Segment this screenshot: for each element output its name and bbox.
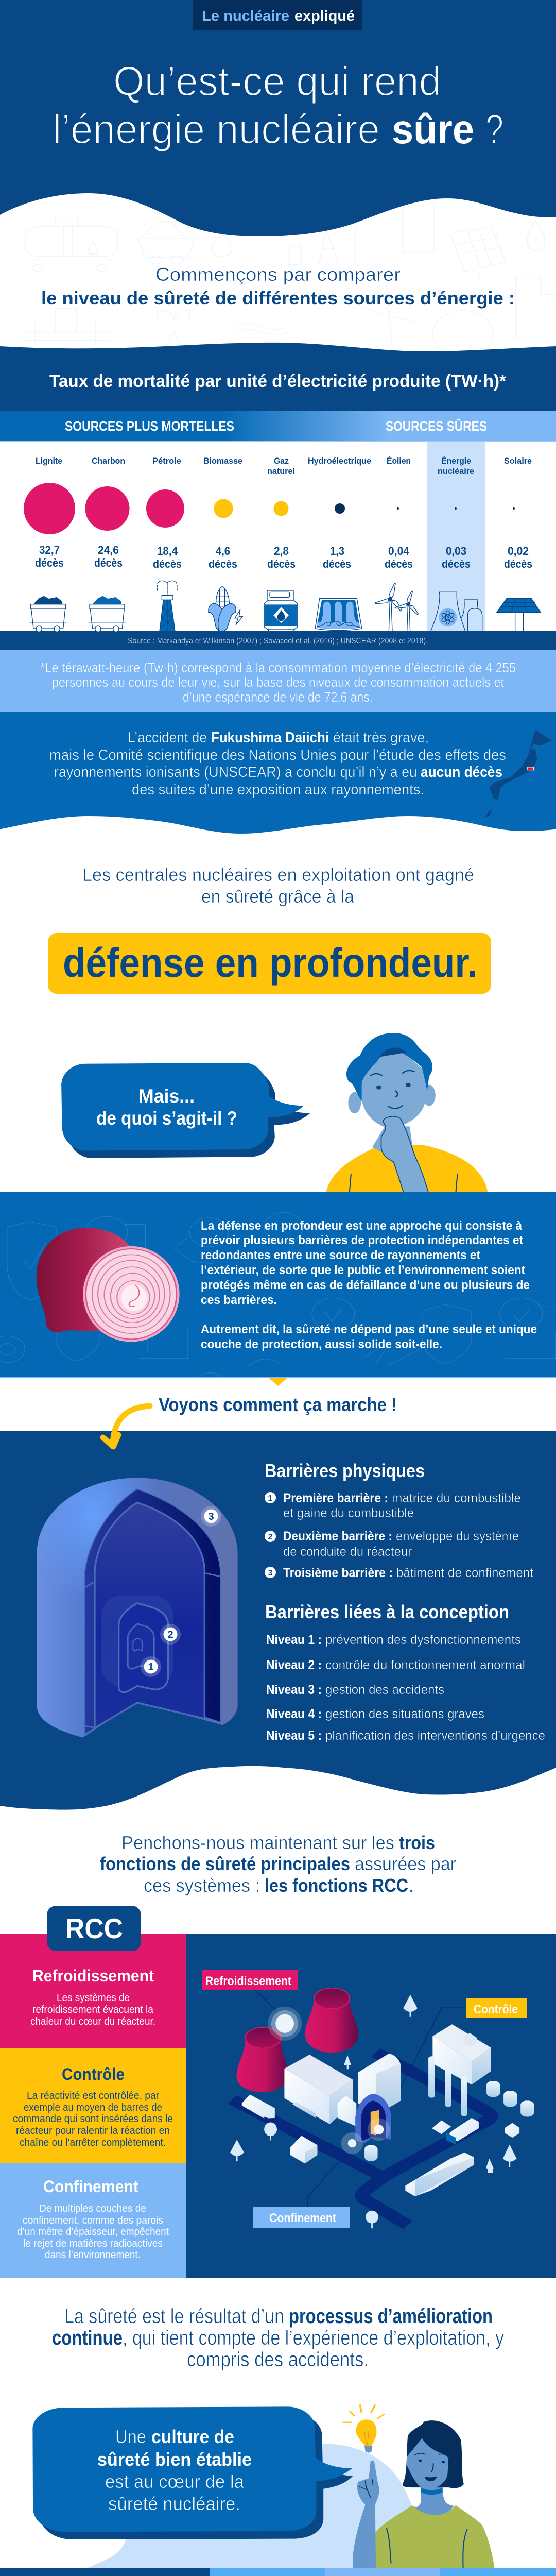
icon: gas cylinder: [264, 590, 298, 631]
marker 3: [201, 1506, 221, 1527]
main buildings: [284, 2024, 491, 2127]
column labels: Éolien: [387, 456, 411, 466]
explanation text: La défense en profondeur est une approche qui consiste à: [201, 1219, 523, 1233]
death values: décès: [323, 557, 351, 570]
explanation text: ces barrières.: [201, 1293, 277, 1307]
Fukushima text: [49, 730, 506, 798]
pointer triangle: [268, 1378, 288, 1386]
speech bubble: safety culture: sûreté nucléaire.: [108, 2493, 240, 2514]
death values: décès: [504, 557, 532, 570]
title: l’énergie nucléaire: [53, 106, 380, 152]
intro: three safety functions: trois: [399, 1832, 435, 1853]
title: Qu’est-ce qui rend: [113, 58, 441, 104]
column: un esprit critique: [210, 2568, 325, 2576]
source note: Source : Markandya et Wilkinson (2007) ; Sovacool et al. (2016) ; UNSCEAR (2008 et 2018).: [128, 637, 428, 646]
cooling towers: [236, 1988, 358, 2092]
title: [53, 58, 503, 152]
text block: design barriers: Niveau 1 :: [266, 1633, 322, 1647]
text block: physical barriers: 3: [268, 1569, 273, 1578]
marker confinement: [341, 2132, 363, 2154]
Fukushima text: aucun décès: [421, 764, 502, 781]
speech bubble: question: [61, 1063, 310, 1158]
text: continuous improvement: processus d’amélioration: [289, 2305, 493, 2328]
death values: 0,04: [388, 545, 410, 557]
marker 2: [160, 1624, 181, 1645]
trees: [230, 1995, 517, 2228]
character: thinking man: [326, 1033, 488, 1194]
column labels: Énergie: [441, 456, 471, 466]
series tag: Le nucléaire: [202, 8, 289, 24]
neck: [413, 2486, 454, 2515]
panel: refroidissement: Les systèmes de: [57, 1992, 130, 2004]
column labels: Pétrole: [152, 456, 181, 466]
panel: defence in depth explanation: [0, 1192, 556, 1378]
speech bubble: safety culture: [32, 2406, 353, 2539]
panel: contrôle: chaîne ou l’arrêter complètement.: [20, 2137, 166, 2148]
text block: physical barriers: Première barrière :: [283, 1491, 388, 1505]
intro: three safety functions: fonctions de sûreté principales: [100, 1853, 350, 1874]
Fukushima panel background: [0, 712, 556, 834]
column: une démarche rigoureuse: [325, 2568, 440, 2576]
marker 3: 3: [208, 1511, 214, 1522]
death values: 18,4: [157, 545, 178, 557]
defence in depth intro: en sûreté grâce à la: [201, 887, 354, 907]
nuclear highlight column: [427, 442, 485, 631]
panel: refroidissement: Refroidissement: [32, 1967, 154, 1985]
panel: contrôle: Contrôle: [62, 2065, 125, 2083]
speech bubble: question: Mais...: [138, 1086, 195, 1107]
icon: coal cart: [89, 596, 125, 632]
marker 1: [141, 1656, 161, 1677]
column labels: Gaz: [274, 456, 289, 466]
callout: défense en profondeur: défense en profondeur.: [63, 940, 478, 986]
defence in depth intro: Les centrales nucléaires en exploitation ont gagné: [82, 865, 474, 885]
Fukushima text: rayonnements ionisants (UNSCEAR) a conclu qu’il n’y a eu: [54, 764, 417, 781]
death values: décès: [442, 557, 471, 570]
column labels: Hydroélectrique: [308, 456, 371, 466]
text block: design barriers: Niveau 3 :: [266, 1683, 322, 1697]
intro text: [41, 264, 515, 309]
footnote panel: [0, 650, 556, 712]
tag: confinement: Confinement: [269, 2211, 336, 2225]
death values: 0,03: [446, 545, 466, 557]
collar: [421, 2487, 443, 2495]
explanation text: protégés même en cas de défaillance d’une ou plusieurs de: [201, 1278, 530, 1292]
speech bubble: safety culture: culture de: [151, 2426, 234, 2447]
hero section background: [0, 0, 556, 236]
text block: design barriers: gestion des situations graves: [325, 1707, 484, 1721]
panel: refroidissement: refroidissement évacuent la: [32, 2004, 154, 2015]
intro: three safety functions: [100, 1832, 456, 1896]
chart white area: [0, 442, 556, 631]
chart panel: mortality by source: [0, 411, 556, 646]
Fukushima text: était très grave,: [333, 730, 429, 746]
intro: three safety functions: les fonctions RCC: [265, 1875, 408, 1896]
stacks: [428, 2056, 467, 2116]
panel: contrôle: [0, 2048, 186, 2163]
tanks: [364, 2081, 534, 2161]
face: [407, 2438, 448, 2489]
defence in depth intro: [82, 865, 474, 907]
arrow: curved yellow: [103, 1406, 150, 1447]
faint energy icons background: [21, 202, 556, 357]
text block: physical barriers: matrice du combustible: [392, 1491, 521, 1505]
panel: confinement: d’un mètre d’épaisseur, empêchent: [17, 2226, 169, 2238]
map: Japan: [485, 730, 551, 818]
panel: confinement: De multiples couches de: [39, 2203, 146, 2214]
footnote panel: d’une espérance de vie de 72,6 ans.: [183, 689, 373, 705]
panel: confinement: [0, 2163, 186, 2278]
text block: design barriers: contrôle du fonctionnement anormal: [325, 1658, 525, 1672]
death values: décès: [153, 557, 182, 570]
series tag: expliqué: [294, 8, 355, 24]
text: continuous improvement: continue: [52, 2327, 123, 2349]
RCC badge: RCC: [65, 1912, 123, 1944]
column labels: nucléaire: [438, 466, 474, 476]
background line icons: [0, 1213, 556, 1377]
marker 2: 2: [167, 1629, 173, 1640]
text block: design barriers: Niveau 2 :: [266, 1658, 322, 1672]
panel: confinement: confinement, comme des parois: [23, 2215, 163, 2226]
icon: solar panel: [497, 599, 541, 631]
text block: physical barriers: enveloppe du système: [396, 1529, 519, 1544]
explanation text: l’extérieur, de sorte que le public et l’environnement soient: [201, 1263, 525, 1277]
bubbles sized by mortality: [24, 483, 515, 534]
text block: design barriers: Niveau 5 :: [266, 1728, 322, 1743]
death values: décès: [208, 557, 237, 570]
text block: design barriers: Barrières liées à la conception: [265, 1601, 509, 1622]
explanation text: [201, 1219, 537, 1351]
death values: 0,02: [508, 545, 529, 557]
panel: confinement: dans l’environnement.: [45, 2249, 141, 2261]
panel: contrôle: exemple au moyen de barres de: [24, 2102, 162, 2113]
title: sûre: [392, 106, 474, 152]
lightbulb: [356, 2419, 377, 2446]
panel: refroidissement: chaleur du cœur du réacteur.: [30, 2016, 155, 2027]
icons: lignite, coal, oil, biomass: [30, 581, 243, 632]
speech bubble: safety culture: est au cœur de la: [105, 2471, 245, 2492]
panel: plant illustration: [186, 1934, 556, 2278]
column labels: [36, 456, 532, 476]
explanation text: couche de protection, aussi solide soit-elle.: [201, 1337, 442, 1351]
leader lines: [255, 1990, 466, 2207]
death values: 4,6: [216, 545, 230, 557]
intro: three safety functions: assurées par: [355, 1853, 456, 1874]
roads: [232, 2053, 491, 2225]
Fukushima text: des suites d’une exposition aux rayonnements.: [132, 782, 424, 798]
column labels: Biomasse: [203, 456, 242, 466]
heading: how it works: Voyons comment ça marche !: [159, 1394, 397, 1415]
death values: décès: [94, 556, 123, 569]
barriers section background: [0, 1431, 556, 1810]
tag: refroidissement: [202, 1970, 298, 1990]
marker refroidissement: [268, 2007, 302, 2041]
intro: three safety functions: Penchons-nous maintenant sur les: [121, 1832, 394, 1853]
text block: physical barriers: Deuxième barrière :: [283, 1529, 392, 1544]
death values: 32,7: [39, 544, 60, 556]
text block: design barriers: gestion des accidents: [325, 1683, 444, 1697]
intro: three safety functions: .: [409, 1875, 414, 1896]
chart section background: [0, 343, 556, 651]
band: source categories: SOURCES PLUS MORTELLES: [65, 418, 234, 434]
panel: contrôle: réacteur pour ralentir la réaction en: [16, 2125, 170, 2137]
death values: 24,6: [98, 544, 119, 556]
small reactor: [355, 2094, 391, 2143]
column labels: Lignite: [36, 456, 62, 466]
intro text: le niveau de sûreté de différentes sources d’énergie :: [41, 287, 515, 309]
panel: refroidissement: [0, 1934, 186, 2048]
explanation text: Autrement dit, la sûreté ne dépend pas d’une seule et unique: [201, 1323, 537, 1336]
image: cut red onion: [37, 1228, 180, 1342]
text block: design barriers: [265, 1601, 545, 1743]
small blocks: [290, 2121, 519, 2196]
band: source categories: SOURCES SÛRES: [386, 418, 487, 434]
Fukushima text: mais le Comité scientifique des Nations Unies pour l’étude des effets des: [49, 747, 506, 764]
column labels: Solaire: [504, 456, 532, 466]
hair: [403, 2420, 464, 2488]
text block: physical barriers: 1: [268, 1494, 273, 1503]
tag: refroidissement: Refroidissement: [205, 1974, 291, 1988]
panel: contrôle: La réactivité est contrôlée, par: [27, 2090, 159, 2102]
chart title: Taux de mortalité par unité d’électricité produite (TW·h)*: [49, 371, 507, 391]
icon: lignite cart: [30, 596, 66, 632]
explanation text: redondantes entre une source de rayonnements et: [201, 1248, 480, 1262]
column: une communication franche: [440, 2568, 556, 2576]
speech bubble: safety culture: sûreté bien établie: [97, 2449, 252, 2470]
text block: physical barriers: [265, 1460, 533, 1580]
death values: 2,8: [274, 545, 289, 557]
icon: nuclear plant: [431, 592, 482, 631]
panel: confinement: le rejet de matières radioactives: [23, 2238, 163, 2249]
intro: three safety functions: ces systèmes :: [144, 1875, 260, 1896]
Fukushima text: L’accident de: [128, 730, 207, 746]
text block: design barriers: prévention des dysfonctionnements: [325, 1633, 521, 1647]
text: continuous improvement: compris des accidents.: [187, 2348, 369, 2371]
illustration: isometric nuclear plant: [230, 1988, 534, 2228]
panel: contrôle: commande qui sont insérées dans le: [13, 2113, 173, 2125]
decorative blob behind bubble: [85, 2444, 413, 2569]
icon: corn: [208, 586, 243, 631]
band: source categories: [0, 411, 556, 442]
diagram: containment barriers: [37, 1478, 238, 1738]
tag: contrôle: Contrôle: [474, 2003, 518, 2016]
speech bubble: question: de quoi s’agit-il ?: [96, 1108, 237, 1129]
callout: défense en profondeur: [48, 933, 491, 994]
shirt: [374, 2505, 495, 2569]
trucks: [242, 2094, 479, 2145]
character: woman with idea: [342, 2404, 495, 2569]
icon: hydro dam: [315, 599, 362, 631]
series tag: [193, 0, 362, 30]
death values: [35, 544, 532, 570]
panel: confinement: Confinement: [43, 2177, 138, 2196]
death values: décès: [35, 556, 64, 569]
text block: physical barriers: bâtiment de confinement: [396, 1566, 533, 1580]
death values: décès: [267, 557, 296, 570]
explanation text: prévoir plusieurs barrières de protection indépendantes et: [201, 1233, 523, 1247]
text block: physical barriers: de conduite du réacteur: [283, 1545, 412, 1559]
text block: physical barriers: et gaine du combustible: [283, 1506, 414, 1520]
speech bubble: safety culture: Une: [115, 2426, 146, 2447]
icon: wind turbines: [375, 584, 419, 631]
panel: safety culture definition: [0, 2568, 210, 2576]
icon: oil derrick: [158, 581, 177, 631]
icons: gas, hydro, wind, nuclear, solar: [264, 584, 541, 631]
tag: contrôle: [466, 1998, 527, 2018]
text block: physical barriers: Troisième barrière :: [283, 1566, 393, 1580]
death values: décès: [385, 557, 413, 570]
title: ?: [485, 106, 503, 152]
text block: design barriers: planification des interventions d’urgence: [325, 1728, 545, 1743]
text: continuous improvement: La sûreté est le résultat d’un: [64, 2305, 284, 2328]
marker 1: 1: [148, 1662, 154, 1673]
RCC badge: [47, 1906, 141, 1951]
column labels: naturel: [267, 466, 295, 476]
text block: design barriers: Niveau 4 :: [266, 1707, 322, 1721]
text: continuous improvement: [52, 2305, 504, 2371]
intro text: Commençons par comparer: [155, 264, 401, 285]
text block: physical barriers: Barrières physiques: [265, 1460, 425, 1481]
tag: confinement: [253, 2207, 350, 2228]
arm: [353, 2461, 379, 2569]
Fukushima text: Fukushima Daiichi: [211, 730, 329, 746]
death values: 1,3: [330, 545, 344, 557]
text block: physical barriers: 2: [268, 1533, 273, 1541]
column labels: Charbon: [92, 456, 125, 466]
